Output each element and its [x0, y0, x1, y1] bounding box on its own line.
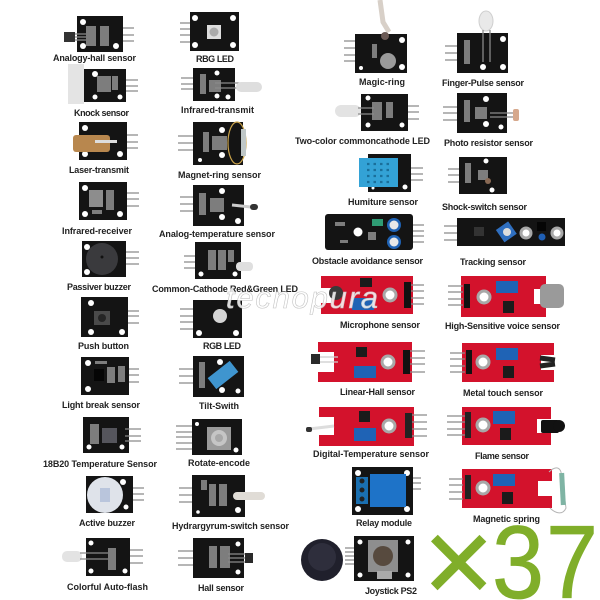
- caption: Infrared-transmit: [181, 105, 254, 115]
- module: Joystick PS2: [301, 536, 417, 596]
- module: Finger-Pulse sensor: [442, 11, 524, 88]
- module: Humiture sensor: [348, 154, 423, 207]
- caption: Analog-temperature sensor: [159, 229, 275, 239]
- caption: Microphone sensor: [340, 320, 420, 330]
- module: High-Sensitive voice sensor: [445, 276, 564, 331]
- caption: Infrared-receiver: [62, 226, 132, 236]
- module: Common-Cathode Red&Green LED: [152, 242, 298, 294]
- module: Infrared-receiver: [62, 182, 139, 236]
- module: Passiver buzzer: [67, 241, 139, 292]
- caption: 18B20 Temperature Sensor: [43, 459, 157, 469]
- caption: Tilt-Swith: [199, 401, 239, 411]
- caption: Common-Cathode Red&Green LED: [152, 284, 298, 294]
- module: Obstacle avoidance sensor: [312, 214, 424, 266]
- module: Colorful Auto-flash: [62, 538, 148, 592]
- caption: Joystick PS2: [365, 586, 417, 596]
- caption: Relay module: [356, 518, 412, 528]
- module: Hydrargyrum-switch sensor: [172, 475, 289, 531]
- module: Digital-Temperature sensor: [306, 407, 429, 459]
- module: Knock sensor: [68, 64, 138, 118]
- module: Linear-Hall sensor: [311, 342, 425, 397]
- caption: Knock sensor: [74, 108, 129, 118]
- module: Magic-ring: [344, 0, 407, 87]
- module: Magnetic spring: [449, 468, 566, 524]
- module: Tracking sensor: [444, 218, 565, 267]
- module: Photo resistor sensor: [443, 93, 533, 148]
- caption: Hall sensor: [198, 583, 244, 593]
- module: Rotate-encode: [176, 419, 250, 468]
- caption: Passiver buzzer: [67, 282, 131, 292]
- caption: Digital-Temperature sensor: [313, 449, 429, 459]
- module: Relay module: [352, 467, 421, 528]
- caption: Linear-Hall sensor: [340, 387, 415, 397]
- caption: Humiture sensor: [348, 197, 418, 207]
- module: Magnet-ring sensor: [178, 122, 261, 180]
- quantity badge: x37: [423, 515, 600, 600]
- module: Analog-temperature sensor: [159, 185, 275, 239]
- caption: Hydrargyrum-switch sensor: [172, 521, 289, 531]
- module: Microphone sensor: [321, 276, 424, 330]
- module: Light break sensor: [62, 357, 140, 410]
- caption: Two-color commoncathode LED: [295, 136, 430, 146]
- caption: Magnetic spring: [473, 514, 540, 524]
- caption: Obstacle avoidance sensor: [312, 256, 423, 266]
- module: RGB LED: [180, 300, 242, 351]
- module: Push button: [78, 297, 139, 351]
- caption: High-Sensitive voice sensor: [445, 321, 560, 331]
- caption: RBG LED: [196, 54, 234, 64]
- caption: Active buzzer: [79, 518, 135, 528]
- module: RBG LED: [180, 12, 239, 64]
- caption: Tracking sensor: [460, 257, 526, 267]
- module: Analogy-hall sensor: [53, 16, 136, 63]
- module: Tilt-Swith: [179, 356, 244, 411]
- caption: Laser-transmit: [69, 165, 129, 175]
- module: 18B20 Temperature Sensor: [43, 417, 157, 469]
- caption: Rotate-encode: [188, 458, 250, 468]
- caption: Push button: [78, 341, 129, 351]
- caption: Finger-Pulse sensor: [442, 78, 524, 88]
- caption: Magnet-ring sensor: [178, 170, 261, 180]
- module: Active buzzer: [79, 476, 144, 528]
- caption: Flame sensor: [475, 451, 529, 461]
- caption: Photo resistor sensor: [444, 138, 533, 148]
- watermark: tecnopura: [226, 280, 378, 315]
- module: Infrared-transmit: [181, 68, 262, 115]
- caption: Metal touch sensor: [463, 388, 543, 398]
- module: Hall sensor: [178, 538, 253, 593]
- caption: Magic-ring: [359, 77, 405, 87]
- module: Laser-transmit: [69, 122, 138, 175]
- caption: RGB LED: [203, 341, 242, 351]
- module: Metal touch sensor: [450, 343, 555, 398]
- caption: Colorful Auto-flash: [67, 582, 148, 592]
- module: Shock-switch sensor: [442, 157, 527, 212]
- caption: Shock-switch sensor: [442, 202, 527, 212]
- caption: Light break sensor: [62, 400, 140, 410]
- caption: Analogy-hall sensor: [53, 53, 136, 63]
- module: Two-color commoncathode LED: [295, 94, 430, 146]
- module: Flame sensor: [447, 407, 565, 461]
